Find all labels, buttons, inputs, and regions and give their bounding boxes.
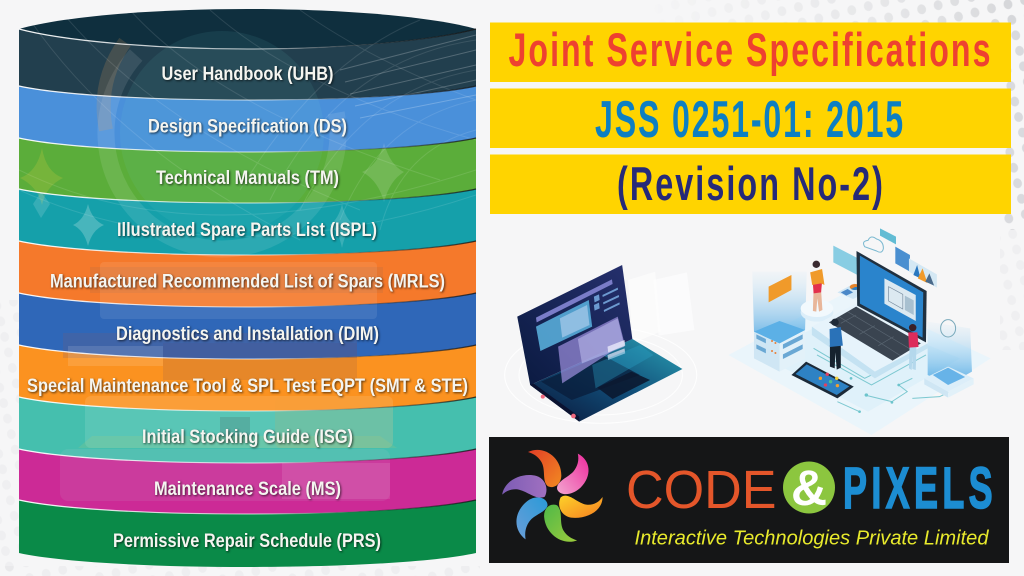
screen panels (536, 300, 592, 351)
floor (728, 292, 991, 435)
label: Manufactured Recommended List of Spars: Manufactured Recommended List of Spars (MRLS) (50, 272, 445, 292)
floating chart (909, 258, 937, 288)
petal green (544, 505, 577, 542)
band: Permissive Repair Schedule (19, 500, 476, 567)
tagline: Interactive Technologies Private Limited (634, 528, 989, 550)
label: Technical Manuals: Technical Manuals (TM) (156, 168, 339, 189)
ampersand badge (783, 460, 835, 516)
floating chat (880, 228, 896, 244)
floating document (895, 247, 910, 272)
server left (752, 272, 807, 372)
illustration: isometric technology scene (728, 228, 991, 435)
woman standing (810, 261, 824, 312)
laptop platform (812, 303, 928, 372)
band: Design Specification (19, 86, 476, 152)
watermark overlay (19, 0, 476, 501)
label: Permissive Repair Schedule: Permissive Repair Schedule (PRS) (113, 531, 381, 552)
screen top bar (536, 279, 613, 322)
touchpad (597, 372, 650, 399)
band: Technical Manuals (19, 138, 476, 203)
laptop screen (856, 251, 927, 342)
pedestal (801, 303, 833, 322)
woman right (908, 324, 918, 370)
label: Maintenance Scale: Maintenance Scale (MS) (154, 479, 341, 500)
ghost panels (628, 272, 660, 343)
illustration: open laptop (505, 265, 697, 423)
band: Manufactured Recommended List of Spars (19, 241, 476, 307)
ampersand badge: & (791, 460, 827, 516)
label: Design Specification: Design Specification (DS) (148, 116, 347, 138)
floating cloud (864, 237, 883, 252)
label: Illustrated Spare Parts List: Illustrated Spare Parts List (ISPL) (117, 220, 377, 241)
petal red (528, 450, 561, 487)
keyboard (829, 307, 921, 361)
petal purple (502, 475, 546, 498)
petal yellow (559, 496, 603, 518)
keyboard (541, 355, 640, 400)
orbit rings (505, 327, 697, 423)
circuit traces (814, 348, 950, 412)
server right (924, 320, 974, 398)
band: Initial Stocking Guide (19, 397, 476, 463)
petal pink (557, 454, 589, 494)
logo pinwheel (502, 450, 603, 542)
laptop screen (517, 265, 632, 385)
screen window (884, 278, 916, 321)
man standing (830, 319, 843, 370)
mini dashboard (837, 283, 870, 299)
cylinder top ellipse (19, 9, 476, 49)
envelope (769, 275, 791, 302)
laptop base (530, 339, 682, 422)
label: Initial Stocking Guide: Initial Stocking Guide (ISG) (142, 427, 353, 448)
band: Diagnostics and Installation (19, 293, 476, 359)
logo panel: Code & Pixels (489, 437, 1009, 563)
band: Illustrated Spare Parts List (19, 189, 476, 255)
wordmark CODE: CODE (626, 460, 776, 520)
label: Special Maintenance Tool: Special Maintenance Tool & SPL Test EQPT (SMT & STE) (27, 376, 468, 397)
band: Special Maintenance Tool (19, 345, 476, 411)
band: Maintenance Scale (19, 449, 476, 514)
band labels (27, 64, 468, 552)
label: User Handbook: User Handbook (UHB) (162, 64, 334, 85)
cylinder stack chart (19, 0, 476, 567)
petal blue (516, 497, 548, 539)
banner: Revision No-2 (490, 154, 1011, 214)
band edge highlights (19, 29, 476, 514)
phone (791, 362, 854, 398)
banner: Revision No-2: (Revision No-2) (617, 157, 885, 210)
band: User Handbook (19, 29, 476, 100)
teal text panel (833, 246, 861, 277)
label: Diagnostics and Installation: Diagnostics and Installation (DIM) (116, 324, 379, 345)
glowing corners (541, 395, 545, 399)
